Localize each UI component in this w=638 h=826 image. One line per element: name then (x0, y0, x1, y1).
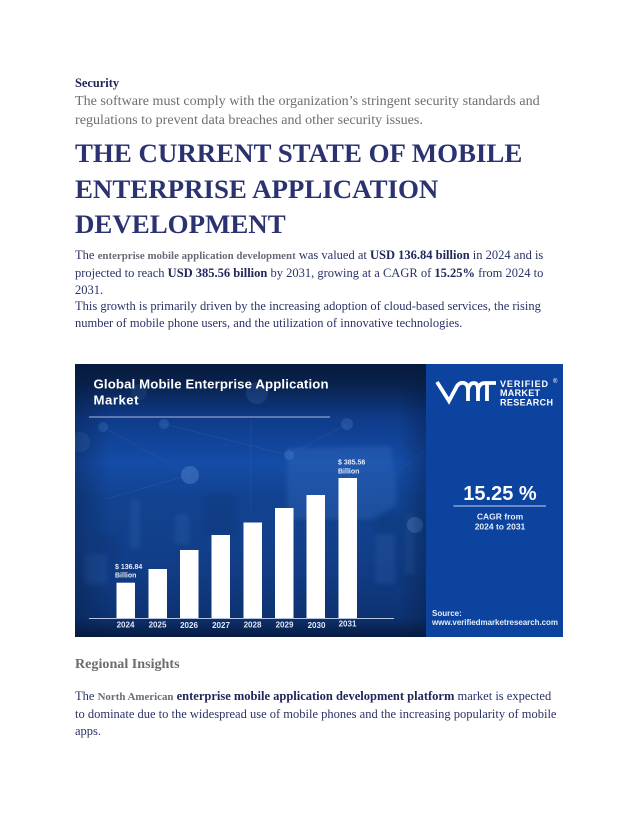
caption: CAGR period: 2024 to 2031 (475, 522, 526, 532)
axis labels: years: 2030 (308, 621, 326, 630)
value label: 2031: Billion (338, 468, 359, 475)
panel: CAGR sidebar (426, 364, 563, 637)
icon: Verified Market Research logo: RESEARCH (500, 397, 553, 407)
title: ENTERPRISE APPLICATION (75, 174, 438, 204)
value label: 2024: Billion (115, 573, 136, 580)
icon: Verified Market Research logo: ® (553, 378, 558, 385)
text block: market overview: projected to reach USD 385.56 billion by 2031, growing at a CAGR of 15.25% from 2024 to (75, 266, 543, 280)
axis labels: years: 2025 (149, 620, 167, 629)
source note: Source: (432, 609, 462, 618)
title (75, 138, 522, 239)
axis labels: years: 2031 (339, 620, 357, 628)
text block: security description: regulations to prevent data breaches and other security issues. (75, 112, 423, 128)
source note: www.verifiedmarketresearch.com (431, 618, 558, 627)
text block: security description (75, 92, 540, 128)
text block: market overview: The enterprise mobile application development was valued at USD 136.84 billion in 2024 and is (75, 248, 543, 262)
chart image: global mobile enterprise application market (75, 364, 563, 637)
text block: market overview: number of mobile phone users, and the utilization of innovative technologies. (75, 316, 462, 330)
background: city skyline and network nodes (70, 382, 427, 584)
text block: regional insights description (75, 689, 556, 738)
text block: security description: The software must comply with the organization’s stringent security standards and (75, 92, 540, 108)
axis labels: years (117, 620, 357, 630)
icon: Verified Market Research logo: MARKET (500, 388, 540, 398)
axis labels: years: 2028 (244, 620, 262, 629)
statistic: CAGR value: 15.25 % (463, 483, 537, 505)
axis labels: years: 2026 (180, 621, 198, 630)
text block: market overview: 2031. (75, 283, 103, 297)
title: DEVELOPMENT (75, 209, 286, 239)
chart title (94, 376, 328, 408)
caption: CAGR period: CAGR from (477, 512, 523, 522)
chart title: Market (94, 392, 139, 408)
value label: 2024: $ 136.84 (115, 564, 142, 571)
axis labels: years: 2024 (117, 620, 135, 629)
axis labels: years: 2027 (212, 621, 230, 630)
text block: market overview (75, 248, 543, 330)
heading: regional insights: Regional Insights (75, 656, 180, 672)
bar chart (89, 460, 394, 630)
text block: regional insights description: apps. (75, 724, 101, 738)
heading: security: Security (75, 76, 119, 90)
icon: Verified Market Research logo (437, 378, 558, 407)
icon: Verified Market Research logo: VERIFIED (500, 379, 548, 389)
title: THE CURRENT STATE OF MOBILE (75, 138, 522, 168)
text block: market overview: This growth is primarily driven by the increasing adoption of cloud-based services, the rising (75, 299, 541, 313)
axis labels: years: 2029 (276, 620, 294, 629)
value label: 2031: $ 385.56 (338, 460, 365, 467)
chart title: Global Mobile Enterprise Application (94, 376, 328, 392)
text block: regional insights description: to dominate due to the widespread use of mobile phones and the increasing popularity of mobile (75, 707, 556, 721)
text block: regional insights description: The North American enterprise mobile application development platform market is expected (75, 689, 551, 703)
